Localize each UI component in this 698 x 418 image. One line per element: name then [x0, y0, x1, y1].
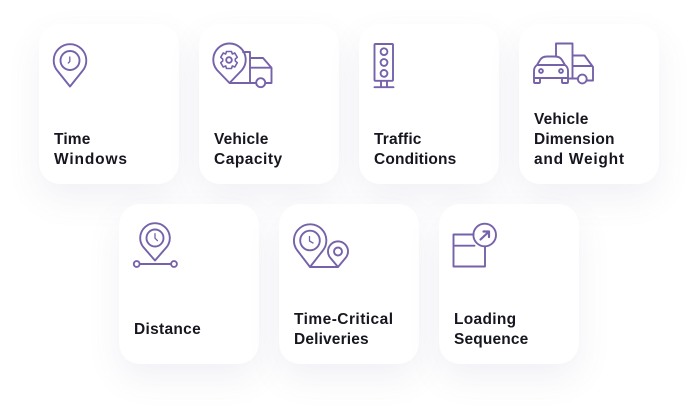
label: time-critical deliveries: Deliveries	[294, 331, 369, 348]
label: traffic conditions: Traffic	[374, 131, 422, 148]
card: time-critical deliveries	[279, 204, 419, 364]
icon: box with arrow	[452, 222, 497, 268]
label: loading sequence: Sequence	[454, 331, 528, 348]
icon: two pins	[293, 223, 349, 268]
label: traffic conditions	[374, 131, 456, 168]
label: vehicle dimension and weight: Dimension	[534, 131, 615, 148]
label: time windows: Windows	[54, 151, 128, 168]
icon: car and truck	[533, 42, 594, 84]
icon: traffic light	[374, 43, 394, 88]
label: loading sequence	[454, 311, 528, 348]
card: time windows	[39, 24, 179, 184]
label: loading sequence: Loading	[454, 311, 516, 328]
label: vehicle capacity: Capacity	[214, 151, 283, 168]
card: vehicle capacity	[199, 24, 339, 184]
label: vehicle dimension and weight	[534, 111, 625, 168]
card: loading sequence	[439, 204, 579, 364]
label: vehicle dimension and weight: and Weight	[534, 151, 625, 168]
label: distance: Distance	[134, 321, 201, 338]
label: traffic conditions: Conditions	[374, 151, 456, 168]
label: vehicle capacity: Vehicle	[214, 131, 268, 148]
icon: pin on route	[132, 222, 178, 268]
card: distance	[119, 204, 259, 364]
label: time windows: Time	[54, 131, 90, 148]
icon: gear pin and truck	[212, 42, 272, 88]
label: time-critical deliveries	[294, 311, 393, 348]
label: vehicle capacity	[214, 131, 283, 168]
label: time windows	[54, 131, 128, 168]
label: vehicle dimension and weight: Vehicle	[534, 111, 588, 128]
icon: clock pin	[52, 43, 88, 88]
card: vehicle dimension and weight	[519, 24, 659, 184]
card: traffic conditions	[359, 24, 499, 184]
label: time-critical deliveries: Time-Critical	[294, 311, 393, 328]
